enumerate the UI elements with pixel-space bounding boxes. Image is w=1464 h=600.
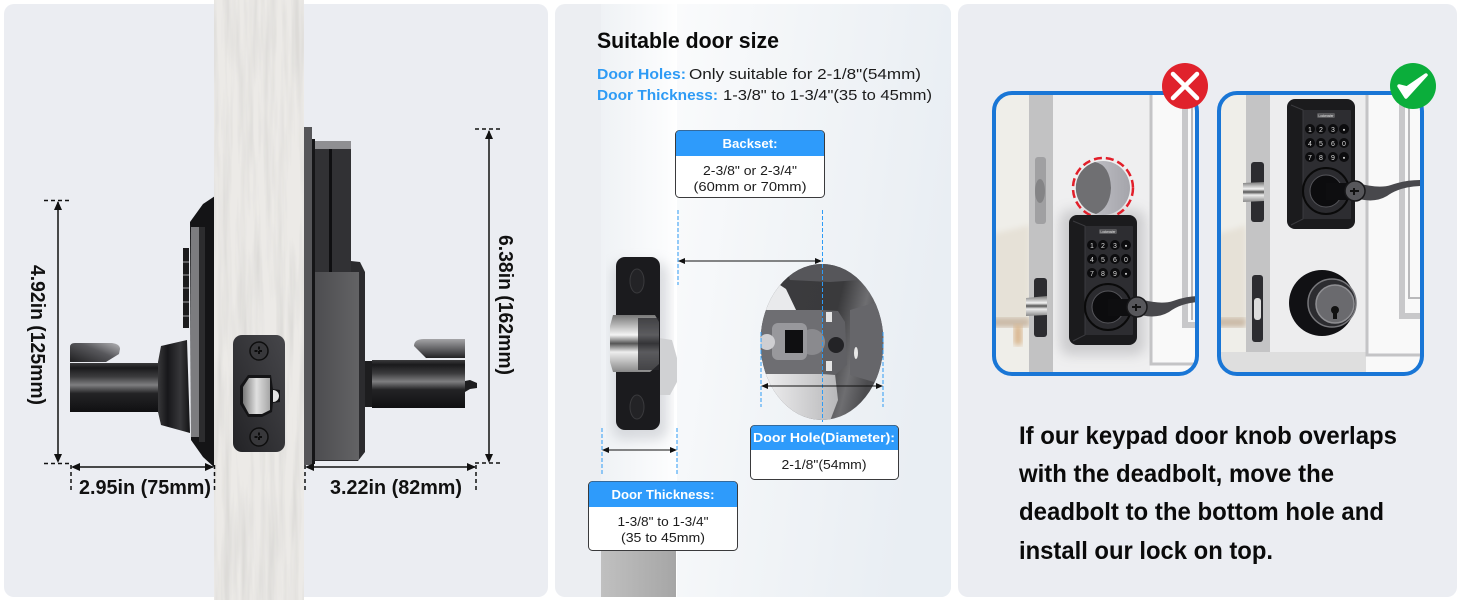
dimension: 2.95in depth: 2.95in (75mm) bbox=[79, 477, 211, 499]
keypad lock, incorrect placement: ▪ bbox=[1125, 271, 1128, 278]
lower strike plate bbox=[1252, 275, 1263, 342]
callout: door hole diameter bbox=[750, 426, 898, 480]
deadbolt bbox=[1289, 270, 1356, 336]
right lock side view bbox=[304, 127, 477, 465]
keypad lock, correct placement: 4 bbox=[1308, 141, 1312, 148]
deadbolt overlap marker bbox=[1073, 158, 1133, 218]
advice text: install our lock on top. bbox=[1019, 537, 1273, 565]
advice text bbox=[1018, 422, 1397, 565]
keypad lock, correct placement: ▪ bbox=[1343, 155, 1346, 162]
keypad lock, incorrect placement bbox=[1069, 215, 1199, 345]
keypad lock, incorrect placement: 7 bbox=[1090, 271, 1094, 278]
dimension: 2.95in depth bbox=[71, 463, 214, 499]
callout: door hole diameter: 2-1/8"(54mm) bbox=[782, 457, 866, 472]
icon: green check bbox=[1390, 63, 1436, 109]
keypad lock, incorrect placement: Lockmaster bbox=[1100, 229, 1116, 234]
keypad lock, correct placement: Lockmaster bbox=[1318, 113, 1334, 118]
keypad lock, incorrect placement: 1 bbox=[1090, 243, 1094, 250]
keypad lock, correct placement: 8 bbox=[1319, 155, 1323, 162]
keypad lock, incorrect placement: 2 bbox=[1101, 243, 1105, 250]
door thickness line: 1-3/8" to 1-3/4"(35 to 45mm) bbox=[723, 87, 932, 104]
keypad lock, correct placement: 7 bbox=[1308, 155, 1312, 162]
dimension: 3.22in depth bbox=[305, 463, 476, 499]
dimension: 4.92in height: 4.92in (125mm) bbox=[26, 265, 48, 405]
upper latch bbox=[1243, 162, 1264, 222]
keypad lock, correct placement: 9 bbox=[1331, 155, 1335, 162]
keypad lock, incorrect placement: 4 bbox=[1090, 257, 1094, 264]
thickness measurement bbox=[602, 428, 677, 476]
panel: installation advice bbox=[958, 4, 1457, 597]
dimension: 6.38in height bbox=[475, 129, 516, 463]
keypad lock, incorrect placement: 6 bbox=[1113, 257, 1117, 264]
door holes line: Only suitable for 2-1/8"(54mm) bbox=[689, 66, 921, 83]
callout: backset: 2-3/8" or 2-3/4" bbox=[703, 163, 797, 178]
callout: backset bbox=[676, 130, 824, 198]
latch illustration bbox=[610, 257, 677, 430]
keypad lock, correct placement: 2 bbox=[1319, 127, 1323, 134]
dimension: 3.22in depth: 3.22in (82mm) bbox=[330, 477, 462, 499]
keypad lock, incorrect placement: ▪ bbox=[1125, 243, 1128, 250]
keypad lock, correct placement: ▪ bbox=[1343, 127, 1346, 134]
latch plate bbox=[233, 335, 285, 452]
keypad lock, correct placement: 3 bbox=[1331, 127, 1335, 134]
keypad lock, correct placement: 5 bbox=[1319, 141, 1323, 148]
door cross-section with wood grain bbox=[214, 0, 304, 600]
door holes line: Door Holes: bbox=[597, 66, 686, 83]
backset measurement bbox=[678, 210, 822, 422]
panel: suitable door size bbox=[555, 4, 951, 597]
keypad lock, incorrect placement: 9 bbox=[1113, 271, 1117, 278]
dimension: 6.38in height: 6.38in (162mm) bbox=[494, 235, 516, 375]
advice text: deadbolt to the bottom hole and bbox=[1019, 498, 1384, 526]
advice text: If our keypad door knob overlaps bbox=[1019, 422, 1397, 450]
keypad lock, incorrect placement: 3 bbox=[1113, 243, 1117, 250]
keypad lock, incorrect placement: 5 bbox=[1101, 257, 1105, 264]
callout: door thickness: (35 to 45mm) bbox=[621, 530, 705, 545]
icon: red cross bbox=[1162, 63, 1208, 109]
photo: incorrect installation bbox=[988, 93, 1199, 374]
callout: door hole diameter: Door Hole(Diameter): bbox=[753, 430, 895, 445]
door thickness line: Door Thickness: bbox=[597, 87, 718, 104]
keypad lock, correct placement: 1 bbox=[1308, 127, 1312, 134]
door hole illustration bbox=[759, 264, 884, 421]
keypad lock, incorrect placement: 8 bbox=[1101, 271, 1105, 278]
keypad lock, correct placement: 6 bbox=[1331, 141, 1335, 148]
callout: backset: (60mm or 70mm) bbox=[694, 179, 806, 194]
callout: door thickness: 1-3/8" to 1-3/4" bbox=[618, 514, 709, 529]
heading: Suitable door size bbox=[597, 28, 779, 53]
callout: door thickness: Door Thickness: bbox=[612, 487, 714, 502]
dimension: 4.92in height bbox=[26, 200, 71, 464]
callout: backset: Backset: bbox=[722, 136, 778, 151]
keypad lock, correct placement: 0 bbox=[1342, 141, 1346, 148]
panel: lock dimensions bbox=[4, 0, 548, 600]
left lock side view bbox=[70, 196, 215, 468]
advice text: with the deadbolt, move the bbox=[1018, 460, 1334, 488]
keypad lock, correct placement bbox=[1287, 99, 1420, 229]
photo: correct installation bbox=[1213, 93, 1422, 374]
keypad lock, incorrect placement: 0 bbox=[1124, 257, 1128, 264]
hole diameter measurement bbox=[761, 332, 883, 407]
callout: door thickness bbox=[588, 482, 738, 550]
